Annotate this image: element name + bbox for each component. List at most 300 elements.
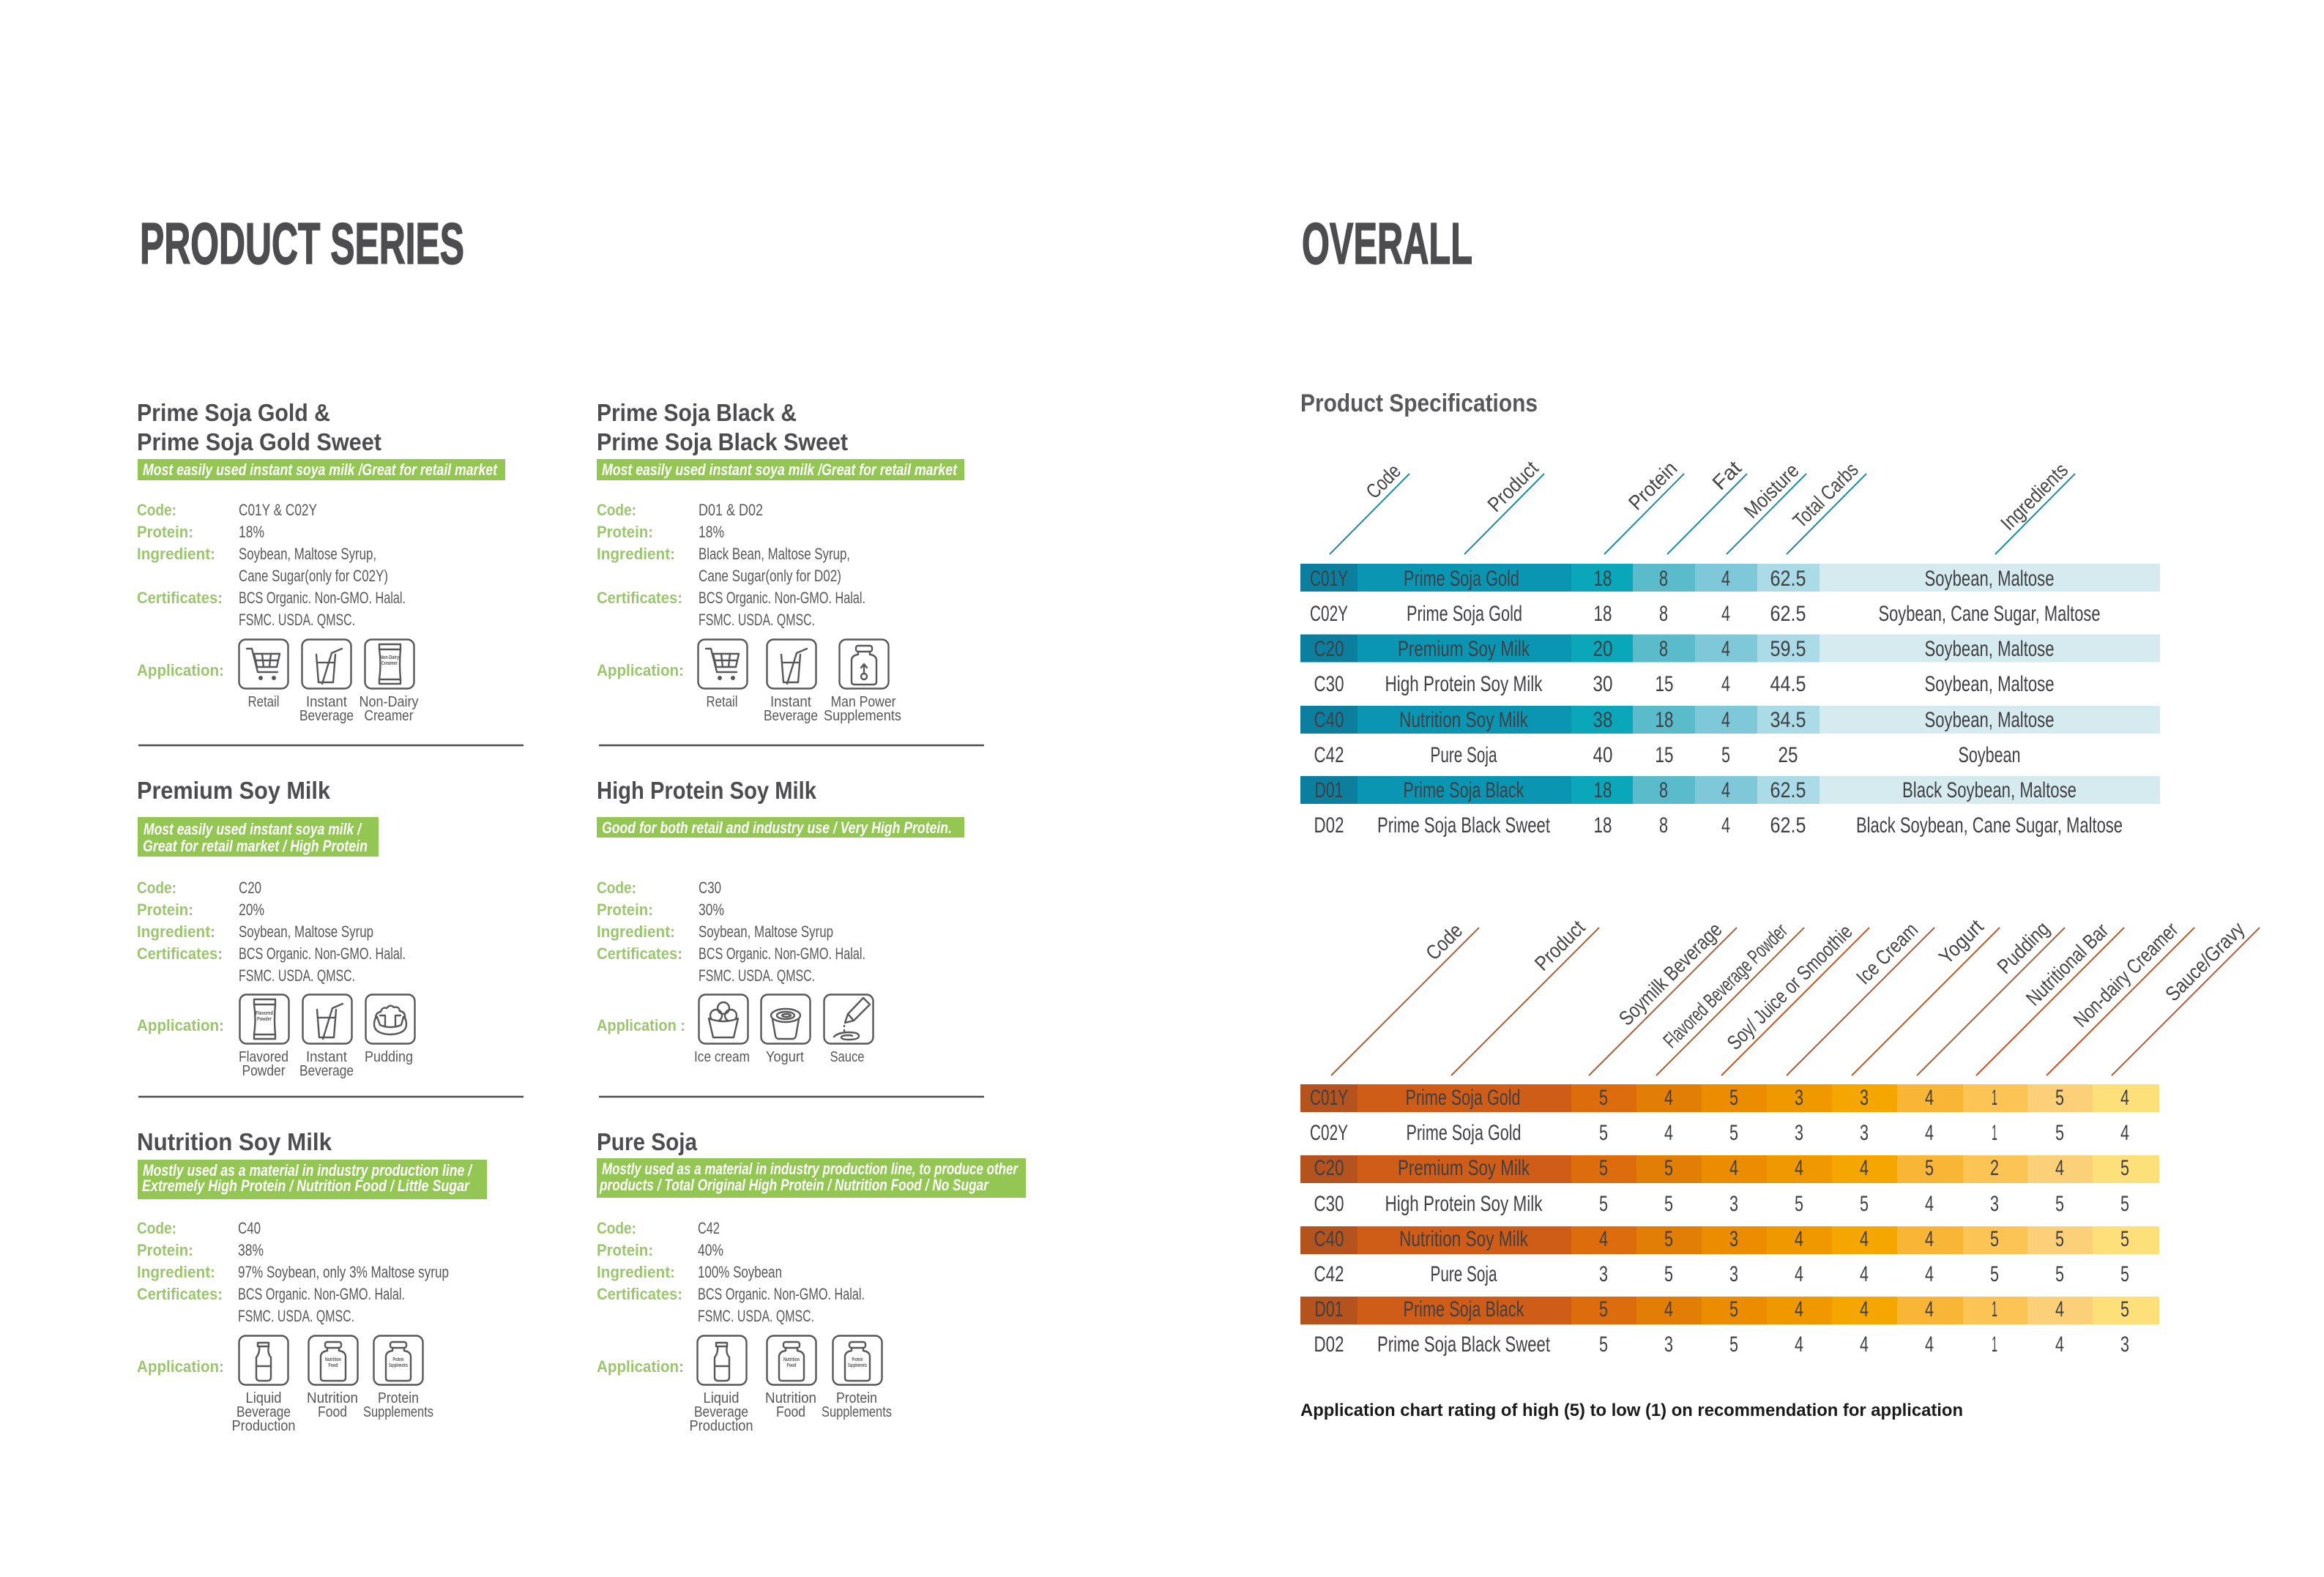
row: C30 bbox=[1314, 1192, 2129, 1216]
spec values: FSMC. USDA. QMSC. bbox=[239, 611, 355, 629]
icon: flavored powder: Powder bbox=[242, 1063, 286, 1079]
spec labels: Code: bbox=[597, 501, 636, 519]
panel: high protein soy milk bbox=[597, 777, 964, 1065]
column headers: Ice Cream bbox=[1852, 918, 1922, 988]
icon: nutrition food: Nutrition bbox=[307, 1390, 358, 1406]
row: C42: C42 bbox=[1314, 1262, 1344, 1286]
row: D01: Prime Soja Black bbox=[1403, 1297, 1524, 1321]
icon: nutrition food: Food bbox=[328, 1363, 338, 1368]
spec values: FSMC. USDA. QMSC. bbox=[698, 1307, 814, 1325]
column headers: Code bbox=[1421, 919, 1467, 964]
spec labels: Protein: bbox=[597, 523, 653, 541]
row: C42: 5 bbox=[1664, 1262, 1673, 1286]
spec values: BCS Organic. Non-GMO. Halal. bbox=[699, 589, 865, 607]
row: C40: 38 bbox=[1593, 708, 1612, 732]
row: C20: 4 bbox=[1729, 1156, 1738, 1180]
icon: retail: Retail bbox=[247, 694, 280, 710]
row: C01Y: Prime Soja Gold bbox=[1406, 1086, 1520, 1110]
icon: protein supplements: Supplements bbox=[363, 1404, 433, 1420]
spec values: 30% bbox=[699, 901, 724, 919]
spec values: BCS Organic. Non-GMO. Halal. bbox=[698, 1285, 865, 1303]
row: C20: 5 bbox=[1664, 1156, 1673, 1180]
icon: protein supplements: Supplements bbox=[389, 1363, 408, 1368]
row: C02Y: 1 bbox=[1992, 1121, 1997, 1145]
panel: nutrition soy milk bbox=[137, 1128, 487, 1434]
row: C20: 4 bbox=[1795, 1156, 1803, 1180]
row: C30: High Protein Soy Milk bbox=[1385, 672, 1543, 696]
spec values: C30 bbox=[699, 879, 721, 897]
row: C01Y: 4 bbox=[1925, 1086, 1934, 1110]
row: D02: D02 bbox=[1314, 813, 1344, 838]
icon: protein supplements: Protein bbox=[836, 1390, 877, 1406]
row: C02Y: 3 bbox=[1795, 1121, 1803, 1145]
spec values: 20% bbox=[239, 901, 264, 919]
row: D02: 3 bbox=[2120, 1332, 2129, 1357]
row: D01: 4 bbox=[2055, 1297, 2064, 1321]
row: C42: 4 bbox=[1925, 1262, 1934, 1286]
row: C42: Pure Soja bbox=[1431, 1262, 1497, 1286]
spec labels bbox=[597, 879, 685, 1034]
icon: instant beverage: Instant bbox=[306, 694, 347, 710]
spec labels: Certificates: bbox=[597, 944, 682, 963]
row: C30: 30 bbox=[1593, 672, 1612, 696]
spec values: Black Bean, Maltose Syrup, bbox=[699, 545, 850, 563]
icon: flavored powder: Powder bbox=[257, 1017, 272, 1022]
row: C02Y: 3 bbox=[1860, 1121, 1869, 1145]
row: C30: C30 bbox=[1314, 1192, 1344, 1216]
spec values: C20 bbox=[239, 879, 261, 897]
spec values bbox=[238, 1219, 449, 1325]
row: C30: 5 bbox=[1599, 1192, 1608, 1216]
column headers: Fat bbox=[1707, 456, 1746, 494]
icon: sauce bbox=[824, 994, 873, 1065]
row: D02: 1 bbox=[1992, 1332, 1997, 1357]
row: C30: 3 bbox=[1729, 1192, 1738, 1216]
column headers: Ingredients bbox=[1996, 458, 2072, 534]
row: C42: 40 bbox=[1593, 743, 1612, 767]
icon: protein supplements bbox=[363, 1335, 433, 1420]
row: C02Y bbox=[1310, 1121, 2129, 1145]
icon: man power supplements bbox=[824, 640, 901, 724]
row: D02: 3 bbox=[1664, 1332, 1673, 1357]
spec labels: Ingredient: bbox=[137, 922, 215, 941]
icon: instant beverage: Instant bbox=[770, 694, 811, 710]
row: C02Y: 5 bbox=[1599, 1121, 1608, 1145]
row: C20: 8 bbox=[1659, 637, 1668, 661]
spec values: FSMC. USDA. QMSC. bbox=[699, 966, 815, 985]
heading: prime soja gold: Prime Soja Gold Sweet bbox=[137, 428, 381, 455]
row: C02Y: 5 bbox=[2055, 1121, 2064, 1145]
spec values: C40 bbox=[238, 1219, 261, 1237]
heading: prime soja black: Prime Soja Black & bbox=[597, 399, 797, 426]
icon: protein supplements: Protein bbox=[852, 1357, 863, 1362]
spec labels: Protein: bbox=[137, 1241, 193, 1259]
row: D02 bbox=[1314, 1332, 2129, 1357]
column headers: Total Carbs bbox=[1789, 458, 1863, 532]
spec values: 18% bbox=[239, 523, 264, 541]
row: C42: Pure Soja bbox=[1431, 743, 1497, 767]
spec labels: Code: bbox=[137, 501, 176, 519]
icon: instant beverage: Beverage bbox=[299, 708, 354, 724]
footnote: rating explanation: Application chart rating of high (5) to low (1) on recommendation for application bbox=[1300, 1401, 1963, 1420]
column headers: Protein bbox=[1624, 457, 1682, 515]
spec labels: Protein: bbox=[137, 901, 193, 919]
icon: yogurt: Yogurt bbox=[766, 1049, 804, 1065]
spec labels: Code: bbox=[137, 879, 176, 897]
row: C02Y: Prime Soja Gold bbox=[1407, 602, 1522, 626]
icon: ice cream bbox=[694, 994, 750, 1065]
row: D02: 4 bbox=[1860, 1332, 1869, 1357]
heading: prime soja gold: Prime Soja Gold & bbox=[137, 399, 330, 426]
row: D01: 4 bbox=[1860, 1297, 1869, 1321]
spec values bbox=[239, 879, 406, 985]
row: C01Y: 3 bbox=[1795, 1086, 1803, 1110]
row: C02Y: Prime Soja Gold bbox=[1406, 1121, 1522, 1145]
row: C30: 3 bbox=[1990, 1192, 1999, 1216]
tagline bar bbox=[597, 1158, 1026, 1198]
tagline bar: Most easily used instant soya milk / bbox=[144, 820, 362, 838]
icon: nutrition food: Food bbox=[318, 1404, 347, 1420]
spec labels: Application: bbox=[597, 661, 684, 679]
row: C40: 4 bbox=[1860, 1227, 1869, 1251]
row: C20: 4 bbox=[2055, 1156, 2064, 1180]
tagline bar: Great for retail market / High Protein bbox=[143, 837, 368, 855]
spec values bbox=[698, 1219, 865, 1325]
row: C01Y bbox=[1310, 567, 2055, 591]
icon: instant beverage bbox=[764, 640, 818, 724]
row: C20: 5 bbox=[2120, 1156, 2129, 1180]
spec labels: Application: bbox=[137, 661, 224, 679]
row: D01: 5 bbox=[1729, 1297, 1738, 1321]
icon: protein supplements: Protein bbox=[378, 1390, 419, 1406]
row: D01: 4 bbox=[1664, 1297, 1673, 1321]
row: C02Y: 4 bbox=[1664, 1121, 1673, 1145]
row: C42: 15 bbox=[1655, 743, 1674, 767]
row: C30: 44.5 bbox=[1770, 672, 1806, 696]
row: C30: 5 bbox=[1664, 1192, 1673, 1216]
spec values: Soybean, Maltose Syrup, bbox=[239, 545, 376, 563]
icon: nutrition food bbox=[307, 1335, 358, 1420]
icon: nutrition food: Food bbox=[786, 1363, 797, 1368]
row: C02Y: 62.5 bbox=[1770, 602, 1806, 626]
spec values: BCS Organic. Non-GMO. Halal. bbox=[699, 944, 865, 963]
icon: non-dairy creamer: Non-Dairy bbox=[380, 655, 399, 660]
spec values: BCS Organic. Non-GMO. Halal. bbox=[238, 1285, 405, 1303]
row: C01Y: Prime Soja Gold bbox=[1404, 567, 1519, 591]
row: C20: 59.5 bbox=[1770, 637, 1806, 661]
icon: man power supplements: Supplements bbox=[824, 708, 901, 724]
row: C40: C40 bbox=[1314, 1227, 1344, 1251]
row: C42: Soybean bbox=[1958, 743, 2021, 767]
spec labels: Application: bbox=[137, 1357, 224, 1376]
row: C30 bbox=[1314, 672, 2055, 696]
title: product series: PRODUCT SERIES bbox=[140, 211, 464, 276]
row: C30: 5 bbox=[2120, 1192, 2129, 1216]
icon: nutrition food: Nutrition bbox=[783, 1357, 800, 1362]
row: C02Y: 4 bbox=[2120, 1121, 2129, 1145]
row: D01: 18 bbox=[1593, 778, 1612, 802]
tagline bar: products / Total Original High Protein / Nutrition Food / No Sugar bbox=[599, 1176, 989, 1194]
icon: flavored powder: Flavored bbox=[239, 1049, 288, 1065]
spec values: 97% Soybean, only 3% Maltose syrup bbox=[238, 1263, 449, 1281]
row: C02Y bbox=[1310, 602, 2100, 626]
row: C01Y: 62.5 bbox=[1770, 567, 1806, 591]
column headers: Pudding bbox=[1993, 917, 2054, 978]
row: C40: 34.5 bbox=[1770, 708, 1806, 732]
tagline bar bbox=[138, 1160, 487, 1199]
tagline bar: Most easily used instant soya milk /Great for retail market bbox=[143, 461, 498, 479]
row: C01Y: 1 bbox=[1992, 1086, 1997, 1110]
column headers bbox=[1330, 456, 2075, 554]
icon: nutrition food: Nutrition bbox=[765, 1390, 816, 1406]
spec labels: Certificates: bbox=[137, 589, 223, 607]
spec values: 38% bbox=[238, 1241, 264, 1259]
spec values: D01 & D02 bbox=[699, 501, 763, 519]
table: application chart bbox=[1300, 915, 2260, 1357]
tagline bar: Mostly used as a material in industry production line, to produce other bbox=[602, 1160, 1018, 1178]
row: D01: 5 bbox=[2120, 1297, 2129, 1321]
icon: flavored powder: Flavored bbox=[256, 1011, 273, 1016]
column headers: Soy/ Juice or Smoothie bbox=[1723, 920, 1857, 1054]
icon: flavored powder bbox=[239, 994, 288, 1079]
row: D02: 18 bbox=[1593, 813, 1612, 838]
row: D02 bbox=[1314, 813, 2123, 838]
row: D01: 4 bbox=[1795, 1297, 1803, 1321]
title: overall: OVERALL bbox=[1302, 211, 1472, 276]
row: C40: 4 bbox=[1795, 1227, 1803, 1251]
row: C01Y: 4 bbox=[1664, 1086, 1673, 1110]
spec labels: Ingredient: bbox=[597, 545, 675, 563]
column headers: Nutritional Bar bbox=[2022, 919, 2113, 1010]
table: product specifications bbox=[1300, 456, 2160, 838]
spec values: BCS Organic. Non-GMO. Halal. bbox=[239, 589, 406, 607]
icon: liquid beverage production: Beverage bbox=[694, 1404, 748, 1420]
spec labels bbox=[137, 1219, 224, 1376]
row: C30: 5 bbox=[1860, 1192, 1869, 1216]
heading: pure soja: Pure Soja bbox=[597, 1128, 698, 1155]
tagline bar: Mostly used as a material in industry production line / bbox=[143, 1161, 473, 1179]
row: C40: Soybean, Maltose bbox=[1924, 708, 2055, 732]
spec labels: Ingredient: bbox=[597, 922, 675, 941]
row: C02Y: 8 bbox=[1659, 602, 1668, 626]
panel: prime soja gold bbox=[137, 399, 505, 724]
row: C02Y: C02Y bbox=[1310, 602, 1348, 626]
spec values: Cane Sugar(only for D02) bbox=[699, 567, 841, 585]
spec values: FSMC. USDA. QMSC. bbox=[239, 966, 355, 985]
spec labels: Code: bbox=[597, 1219, 636, 1237]
row: D01: Prime Soja Black bbox=[1403, 778, 1524, 802]
row: C40: 3 bbox=[1729, 1227, 1738, 1251]
panel: prime soja black bbox=[597, 399, 964, 724]
spec values: 100% Soybean bbox=[698, 1263, 782, 1281]
row: D02: 5 bbox=[1599, 1332, 1608, 1357]
icon: pudding: Pudding bbox=[365, 1049, 413, 1065]
spec labels: Protein: bbox=[137, 523, 193, 541]
row: D01: 62.5 bbox=[1770, 778, 1806, 802]
row: C01Y: 5 bbox=[1599, 1086, 1608, 1110]
icon: non-dairy creamer: Creamer bbox=[365, 708, 414, 724]
spec labels: Ingredient: bbox=[137, 1263, 215, 1281]
spec values: 40% bbox=[698, 1241, 723, 1259]
row: D02: Prime Soja Black Sweet bbox=[1377, 1332, 1550, 1357]
icon: retail bbox=[239, 640, 288, 710]
row: C42: 4 bbox=[1795, 1262, 1803, 1286]
row: C42: C42 bbox=[1314, 743, 1344, 767]
row: C40: 5 bbox=[1990, 1227, 1999, 1251]
row backgrounds bbox=[1300, 564, 2160, 804]
row: C02Y: 5 bbox=[1729, 1121, 1738, 1145]
column headers bbox=[1331, 915, 2260, 1075]
row: D01: D01 bbox=[1315, 1297, 1343, 1321]
icon: non-dairy creamer: Creamer bbox=[381, 661, 398, 666]
spec labels: Application: bbox=[597, 1357, 684, 1376]
row: C30: 4 bbox=[1925, 1192, 1934, 1216]
row: C01Y: C01Y bbox=[1310, 567, 1348, 591]
row: C40 bbox=[1314, 708, 2055, 732]
heading: product specifications: Product Specifications bbox=[1300, 389, 1538, 417]
row: C42: 3 bbox=[1729, 1262, 1738, 1286]
spec values: BCS Organic. Non-GMO. Halal. bbox=[239, 944, 406, 963]
row: C20: 5 bbox=[1599, 1156, 1608, 1180]
row: C30: Soybean, Maltose bbox=[1924, 672, 2055, 696]
heading: prime soja black: Prime Soja Black Sweet bbox=[597, 428, 848, 455]
row: C20: C20 bbox=[1314, 637, 1344, 661]
row: D01: 5 bbox=[1599, 1297, 1608, 1321]
column headers: Moisture bbox=[1740, 459, 1803, 523]
icon: protein supplements: Protein bbox=[392, 1357, 404, 1362]
icon: non-dairy creamer bbox=[359, 640, 419, 724]
spec labels bbox=[137, 501, 224, 679]
icon: instant beverage: Beverage bbox=[299, 1063, 354, 1079]
row: C20 bbox=[1314, 637, 2055, 661]
row: C40 bbox=[1314, 1227, 2129, 1251]
column headers: Product bbox=[1530, 916, 1590, 975]
row: D01 bbox=[1315, 778, 2077, 802]
row: C01Y: 5 bbox=[1729, 1086, 1738, 1110]
column headers: Flavored Beverage Powder bbox=[1658, 919, 1792, 1052]
row: C02Y: Soybean, Cane Sugar, Maltose bbox=[1879, 602, 2100, 626]
row: C02Y: 18 bbox=[1593, 602, 1612, 626]
row: D02: 5 bbox=[1729, 1332, 1738, 1357]
spec values: 18% bbox=[699, 523, 724, 541]
icon: instant beverage: Beverage bbox=[764, 708, 818, 724]
row: C42 bbox=[1314, 743, 2021, 767]
spec values bbox=[699, 501, 865, 629]
row: C40: 5 bbox=[2120, 1227, 2129, 1251]
spec labels: Code: bbox=[597, 879, 636, 897]
icon: instant beverage bbox=[299, 640, 354, 724]
spec values: C42 bbox=[698, 1219, 720, 1237]
icon: protein supplements: Supplements bbox=[822, 1404, 892, 1420]
spec labels: Certificates: bbox=[597, 589, 682, 607]
icon: nutrition food bbox=[765, 1335, 816, 1420]
spec labels: Application: bbox=[137, 1016, 224, 1034]
icon: liquid beverage production bbox=[231, 1335, 296, 1434]
row: C20: Premium Soy Milk bbox=[1398, 1156, 1530, 1180]
row: C40: 4 bbox=[1721, 708, 1730, 732]
row: C42: 5 bbox=[2120, 1262, 2129, 1286]
icon: man power supplements: Man Power bbox=[830, 694, 896, 710]
icon: protein supplements: Supplements bbox=[848, 1363, 867, 1368]
icon: liquid beverage production: Production bbox=[690, 1418, 753, 1434]
row: D02: 8 bbox=[1659, 813, 1668, 838]
row: D01: 1 bbox=[1992, 1297, 1997, 1321]
icon: protein supplements bbox=[822, 1335, 892, 1420]
icon: retail: Retail bbox=[706, 694, 738, 710]
spec values: FSMC. USDA. QMSC. bbox=[238, 1307, 354, 1325]
row: C01Y: C01Y bbox=[1310, 1086, 1348, 1110]
spec labels: Protein: bbox=[597, 1241, 653, 1259]
spec labels bbox=[137, 879, 224, 1034]
row: C01Y: 5 bbox=[2055, 1086, 2064, 1110]
row: D01: 4 bbox=[1721, 778, 1730, 802]
row: C42: 5 bbox=[1990, 1262, 1999, 1286]
spec labels: Certificates: bbox=[137, 944, 223, 963]
spec values: C01Y & C02Y bbox=[239, 501, 317, 519]
row: C01Y bbox=[1310, 1086, 2129, 1110]
row: C40: Nutrition Soy Milk bbox=[1399, 1227, 1529, 1251]
icon: retail bbox=[699, 640, 747, 710]
tagline bar: Good for both retail and industry use / Very High Protein. bbox=[602, 819, 952, 837]
row: C30: 5 bbox=[1795, 1192, 1803, 1216]
icon: nutrition food: Nutrition bbox=[325, 1357, 341, 1362]
tagline bar: Extremely High Protein / Nutrition Food / Little Sugar bbox=[142, 1177, 470, 1195]
spec values bbox=[239, 501, 406, 629]
row: C20 bbox=[1314, 1156, 2129, 1180]
row: C20: Soybean, Maltose bbox=[1924, 637, 2055, 661]
row: C30: 15 bbox=[1655, 672, 1674, 696]
spec values: FSMC. USDA. QMSC. bbox=[699, 611, 815, 629]
row: C30: 5 bbox=[2055, 1192, 2064, 1216]
tagline bar bbox=[138, 817, 379, 857]
spec values: Cane Sugar(only for C02Y) bbox=[239, 567, 388, 585]
row: C20: 20 bbox=[1593, 637, 1612, 661]
icon: non-dairy creamer: Non-Dairy bbox=[359, 694, 419, 710]
row: C40: 5 bbox=[1664, 1227, 1673, 1251]
row: C40: 5 bbox=[2055, 1227, 2064, 1251]
column headers: Yogurt bbox=[1934, 915, 1988, 969]
icon: instant beverage bbox=[299, 994, 354, 1079]
column headers: Non-dairy Creamer bbox=[2069, 918, 2183, 1032]
spec values: Soybean, Maltose Syrup bbox=[699, 922, 833, 941]
column headers: Sauce/Gravy bbox=[2161, 917, 2249, 1005]
heading: prime soja gold bbox=[137, 399, 381, 455]
row: D02: 4 bbox=[1925, 1332, 1934, 1357]
row: D02: D02 bbox=[1314, 1332, 1344, 1357]
row: C01Y: 8 bbox=[1659, 567, 1668, 591]
row: C42: 3 bbox=[1599, 1262, 1608, 1286]
icon: liquid beverage production bbox=[690, 1335, 753, 1434]
spec labels: Ingredient: bbox=[597, 1263, 675, 1281]
spec labels bbox=[597, 501, 684, 679]
spec values: Soybean, Maltose Syrup bbox=[239, 922, 373, 941]
icon: sauce: Sauce bbox=[830, 1049, 864, 1065]
spec labels bbox=[597, 1219, 684, 1376]
row: D02: 4 bbox=[2055, 1332, 2064, 1357]
row: C40: 4 bbox=[1599, 1227, 1608, 1251]
row: D02: Prime Soja Black Sweet bbox=[1377, 813, 1550, 838]
row: D02: 4 bbox=[1795, 1332, 1803, 1357]
row: D01: 8 bbox=[1659, 778, 1668, 802]
row: C01Y: Soybean, Maltose bbox=[1924, 567, 2055, 591]
row: C30: 4 bbox=[1721, 672, 1730, 696]
heading: nutrition soy milk: Nutrition Soy Milk bbox=[137, 1128, 332, 1155]
row: C20: Premium Soy Milk bbox=[1398, 637, 1530, 661]
row: C40: 18 bbox=[1655, 708, 1674, 732]
row: C02Y: 4 bbox=[1925, 1121, 1934, 1145]
heading: premium soy milk: Premium Soy Milk bbox=[137, 777, 331, 804]
spec labels: Code: bbox=[137, 1219, 176, 1237]
